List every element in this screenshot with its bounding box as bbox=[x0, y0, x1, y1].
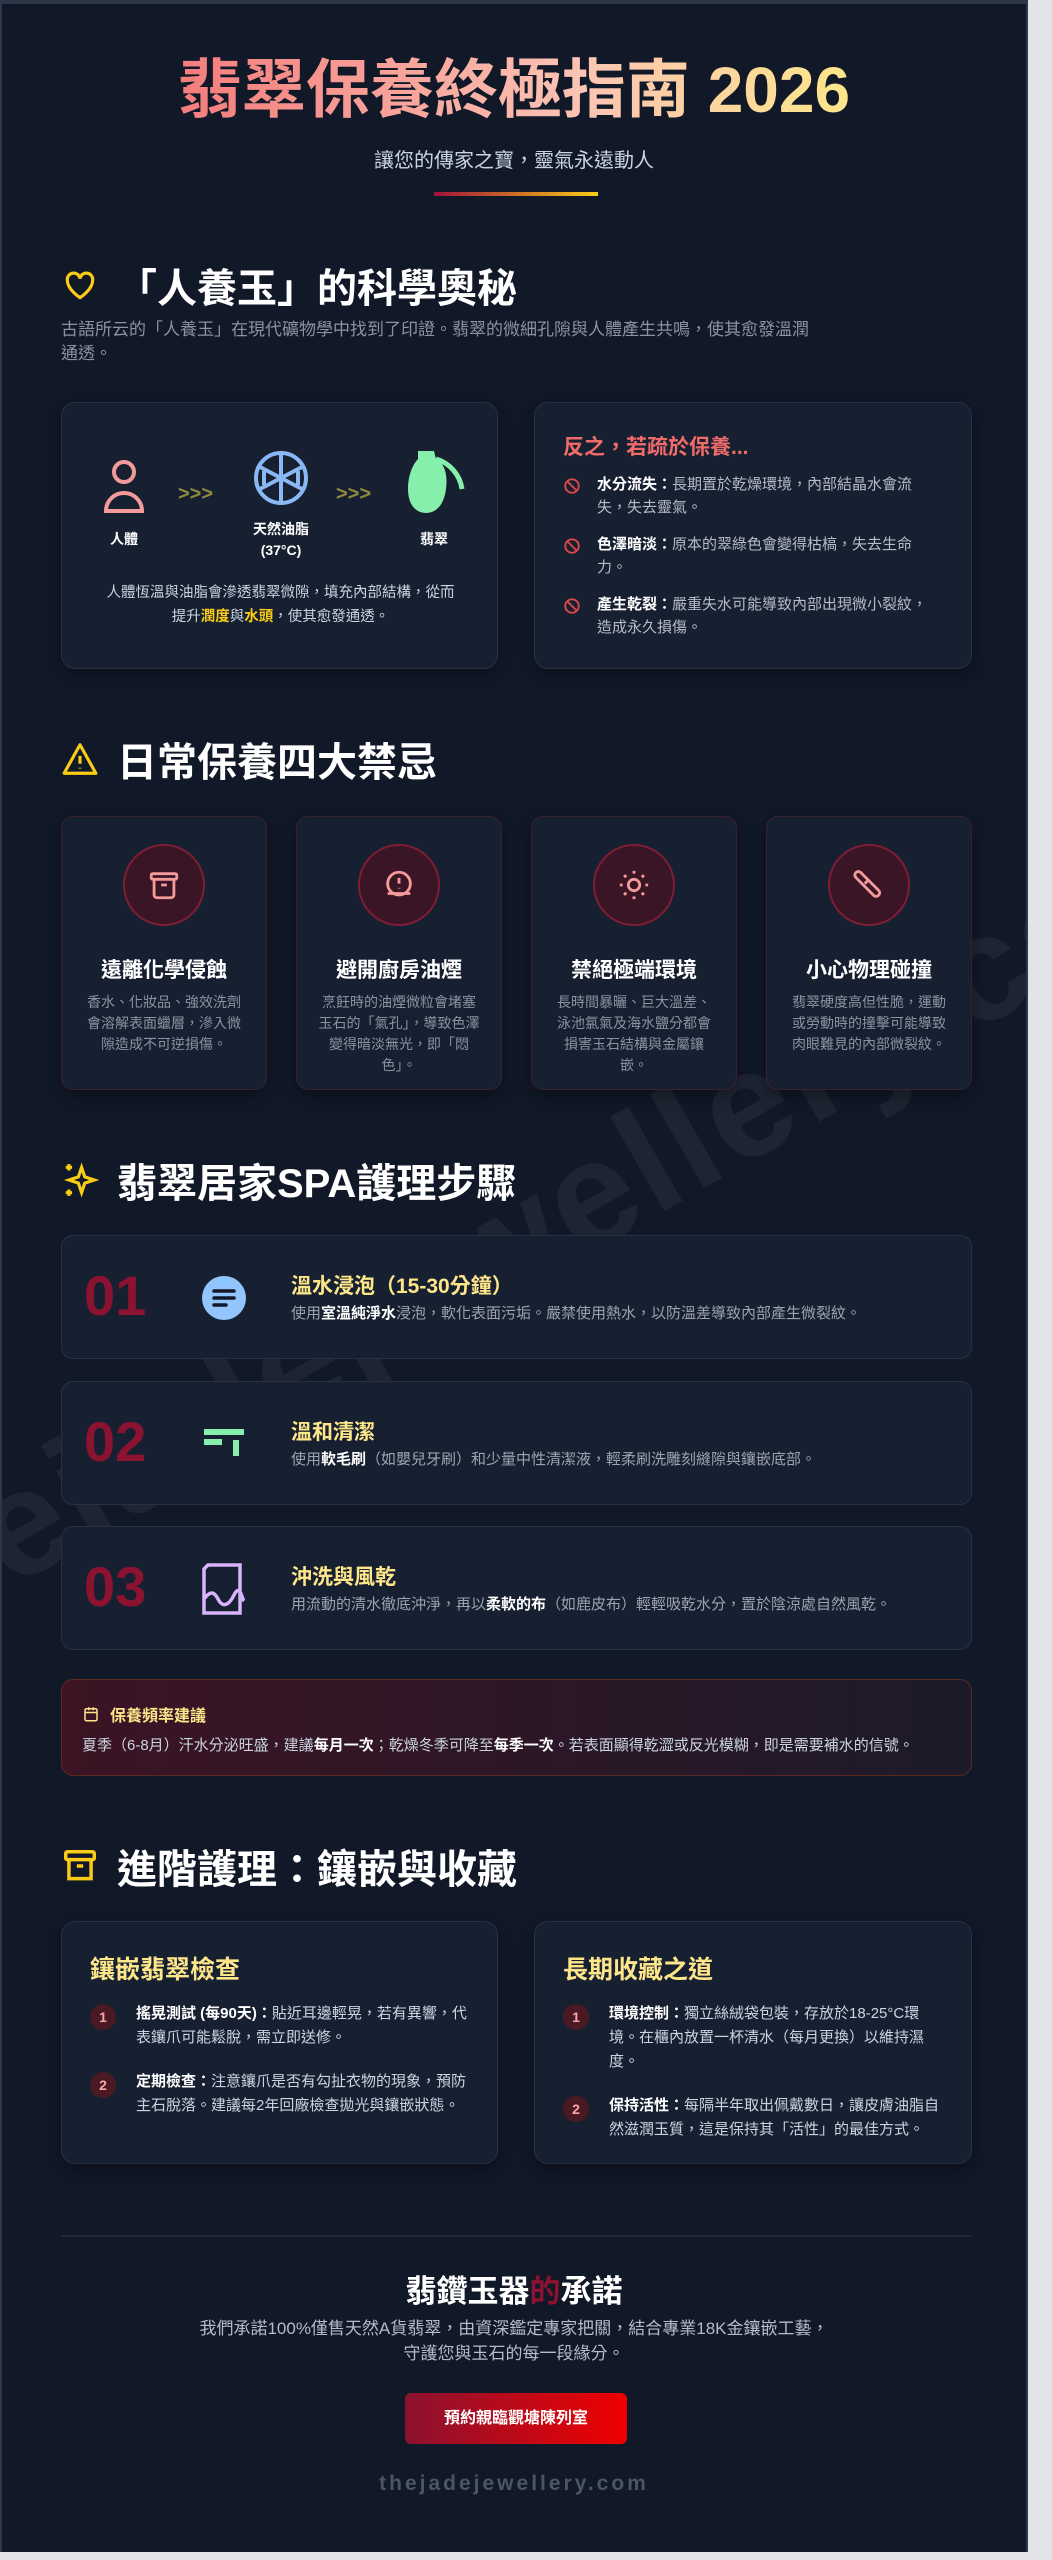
step 2 bbox=[61, 1381, 972, 1505]
taboo card 1: 香水、化妝品、強效洗劑會溶解表面蠟層，滲入微隙造成不可逆損傷。 bbox=[87, 994, 241, 1052]
list: 環境控制：獨立絲絨袋包裝，存放於18-25°C環境。在櫃內放置一杯清水（每月更換）以維持濕度。 bbox=[609, 2005, 924, 2070]
list: 1 bbox=[99, 2009, 107, 2025]
taboo card 4: 翡翠硬度高但性脆，運動或勞動時的撞擊可能導致肉眼難見的內部微裂紋。 bbox=[792, 994, 946, 1052]
step 3: 用流動的清水徹底沖淨，再以柔軟的布（如鹿皮布）輕輕吸乾水分，置於陰涼處自然風乾。 bbox=[291, 1596, 891, 1613]
list: 搖晃測試 (每90天)：貼近耳邊輕晃，若有異響，代表鑲爪可能鬆脫，需立即送修。 bbox=[136, 2005, 467, 2046]
taboo card 1: 遠離化學侵蝕 bbox=[101, 959, 227, 982]
list bbox=[564, 476, 927, 636]
list bbox=[90, 2004, 467, 2114]
taboo card 2: 烹飪時的油煙微粒會堵塞玉石的「氣孔」，導致色澤變得暗淡無光，即「悶色」。 bbox=[318, 994, 480, 1073]
taboo card 2 bbox=[296, 816, 502, 1090]
item: 色澤暗淡：原本的翠綠色會變得枯槁，失去生命力。 bbox=[597, 536, 912, 576]
intro paragraph: 古語所云的「人養玉」在現代礦物學中找到了印證。翡翠的微細孔隙與人體產生共鳴，使其愈發溫潤通透。 bbox=[61, 320, 809, 363]
step 1: 溫水浸泡（15-30分鐘） bbox=[291, 1275, 513, 1298]
gradient line bbox=[434, 192, 598, 196]
panel: setting check bbox=[61, 1921, 498, 2164]
label: body: 人體 bbox=[110, 531, 138, 547]
promise text: 守護您與玉石的每一段緣分。 bbox=[404, 2344, 624, 2363]
icon: person bbox=[104, 460, 144, 513]
panel: neglect bbox=[534, 402, 972, 669]
promise text bbox=[199, 2319, 829, 2363]
footer: thejadejewellery.com bbox=[379, 2472, 649, 2495]
panel: process bbox=[61, 402, 498, 669]
heading: 長期收藏之道 bbox=[563, 1956, 713, 1984]
label: oil: (37°C) bbox=[261, 542, 301, 558]
list: 定期檢查：注意鑲爪是否有勾扯衣物的現象，預防主石脫落。建議每2年回廠檢查拋光與鑲嵌狀態。 bbox=[136, 2073, 466, 2114]
step 3: 03 bbox=[84, 1555, 146, 1618]
step 2: 使用軟毛刷（如嬰兒牙刷）和少量中性清潔液，輕柔刷洗雕刻縫隙與鑲嵌底部。 bbox=[291, 1451, 816, 1468]
icon: oil bbox=[254, 451, 308, 505]
step 1: 使用室溫純淨水浸泡，軟化表面污垢。嚴禁使用熱水，以防溫差導致內部產生微裂紋。 bbox=[291, 1305, 861, 1322]
taboo card 4: 小心物理碰撞 bbox=[806, 959, 932, 982]
taboo card 3: 長時間暴曬、巨大溫差、泳池氯氣及海水鹽分都會損害玉石結構與金屬鑲嵌。 bbox=[557, 994, 711, 1073]
step 1 bbox=[61, 1235, 972, 1359]
list: 1 bbox=[572, 2009, 580, 2025]
label: oil bbox=[253, 521, 309, 558]
title: 翡翠保養終極指南 2026 bbox=[178, 54, 850, 126]
callout: frequency tip: 夏季（6-8月）汗水分泌旺盛，建議每月一次；乾燥冬季可降至每季一次。若表面顯得乾澀或反光模糊，即是需要補水的信號。 bbox=[82, 1737, 914, 1754]
description: 人體恆溫與油脂會滲透翡翠微隙，填充內部結構，從而提升潤度與水頭，使其愈發通透。 bbox=[106, 585, 454, 625]
panel: long-term storage bbox=[534, 1921, 972, 2164]
subtitle: 讓您的傳家之寶，靈氣永遠動人 bbox=[374, 150, 654, 172]
taboo card 1 bbox=[61, 816, 267, 1090]
arrow: >>> bbox=[336, 483, 371, 505]
taboo card 4 bbox=[766, 816, 972, 1090]
list: 2 bbox=[572, 2101, 580, 2117]
promise title: 翡鑽玉器的承諾 bbox=[406, 2274, 622, 2309]
item: 產生乾裂：嚴重失水可能導致內部出現微小裂紋，造成永久損傷。 bbox=[597, 596, 927, 636]
label: oil: 天然油脂 bbox=[253, 521, 309, 537]
item: 水分流失：長期置於乾燥環境，內部結晶水會流失，失去靈氣。 bbox=[597, 476, 912, 516]
label: jade: 翡翠 bbox=[420, 531, 448, 547]
promise text: 我們承諾100%僅售天然A貨翡翠，由資深鑑定專家把關，結合專業18K金鑲嵌工藝， bbox=[199, 2319, 829, 2338]
taboo card 3 bbox=[531, 816, 737, 1090]
list: 2 bbox=[99, 2077, 107, 2093]
list: 保持活性：每隔半年取出佩戴數日，讓皮膚油脂自然滋潤玉質，這是保持其「活性」的最佳方式。 bbox=[609, 2097, 939, 2138]
button: 預約親臨觀塘陳列室 bbox=[444, 2410, 588, 2427]
section heading: advanced: 進階護理：鑲嵌與收藏 bbox=[117, 1848, 517, 1892]
callout: frequency tip: 保養頻率建議 bbox=[110, 1708, 206, 1725]
step 3 bbox=[61, 1526, 972, 1650]
taboo card 3: 禁絕極端環境 bbox=[571, 959, 697, 982]
section heading: science: 「人養玉」的科學奧秘 bbox=[117, 267, 517, 311]
arrow: >>> bbox=[178, 483, 213, 505]
taboo card 2: 避開廚房油煙 bbox=[336, 959, 462, 982]
step 3: 沖洗與風乾 bbox=[291, 1566, 396, 1589]
heading: 鑲嵌翡翠檢查 bbox=[90, 1956, 240, 1984]
list bbox=[563, 2004, 939, 2138]
callout: frequency tip bbox=[61, 1679, 972, 1776]
icon: jade bbox=[408, 451, 464, 513]
step 2: 02 bbox=[84, 1410, 146, 1473]
heading: 反之，若疏於保養... bbox=[563, 436, 749, 459]
step 2: 溫和清潔 bbox=[291, 1421, 375, 1444]
step 1: 01 bbox=[84, 1264, 146, 1327]
section heading: spa: 翡翠居家SPA護理步驟 bbox=[117, 1162, 516, 1206]
button bbox=[405, 2393, 627, 2444]
section heading: taboos: 日常保養四大禁忌 bbox=[117, 741, 437, 785]
